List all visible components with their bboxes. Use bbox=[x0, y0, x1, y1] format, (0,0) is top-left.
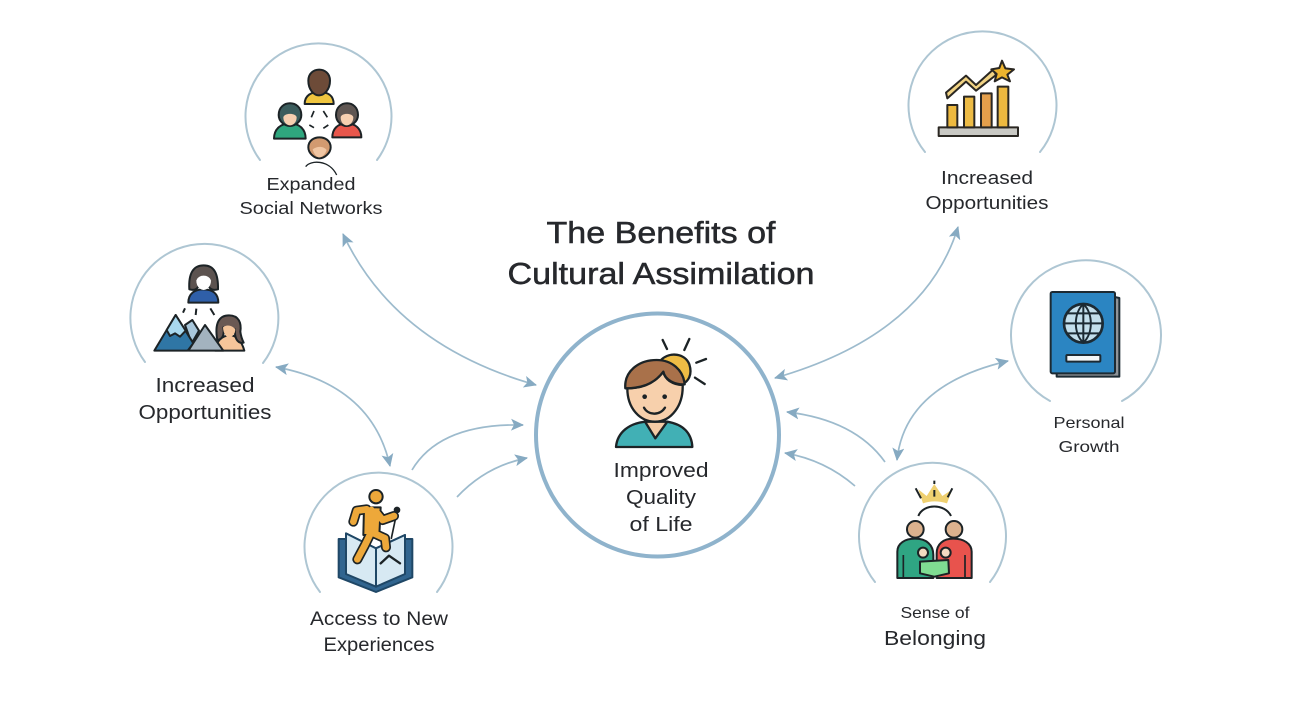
label bbox=[1054, 415, 1124, 456]
icon: hiker on open book bbox=[339, 490, 412, 592]
arrow: increased opportunities right to centre bbox=[775, 227, 958, 378]
hiker limbs outline bbox=[353, 509, 394, 559]
arrow: expanded social networks to centre bbox=[343, 234, 536, 385]
label bbox=[614, 460, 708, 536]
title bbox=[508, 215, 814, 291]
label: Expanded bbox=[266, 174, 356, 194]
label: Sense of bbox=[900, 605, 970, 622]
icon: rising bar chart with star bbox=[939, 61, 1018, 136]
arrow: increased opportunities to access to new experiences bbox=[276, 367, 390, 466]
label: Access to New bbox=[310, 609, 448, 630]
arrows connecting benefits to the centre bbox=[276, 227, 1008, 497]
label bbox=[138, 375, 272, 424]
label: Belonging bbox=[884, 627, 986, 650]
panel: improved quality of life bbox=[536, 314, 779, 556]
label: Experiences bbox=[324, 635, 434, 656]
label: Personal bbox=[1054, 415, 1124, 432]
label bbox=[310, 609, 448, 656]
label bbox=[926, 167, 1048, 213]
panel: access to new experiences bbox=[305, 473, 452, 656]
label: Increased bbox=[156, 375, 254, 397]
label: Opportunities bbox=[138, 402, 272, 424]
label: Social Networks bbox=[240, 198, 383, 218]
icon: smiling person with idea rays bbox=[616, 339, 706, 447]
title: Cultural Assimilation bbox=[508, 256, 814, 291]
label: Growth bbox=[1058, 439, 1120, 456]
arrow: access to new experiences to centre, lower bbox=[457, 458, 527, 497]
title: The Benefits of bbox=[546, 215, 776, 250]
label bbox=[884, 605, 986, 650]
arrow: personal growth to sense of belonging bbox=[897, 361, 1008, 460]
panel: increased opportunities left bbox=[130, 244, 278, 424]
panel: sense of belonging bbox=[859, 463, 1006, 650]
icon: two people exchanging under a crown bbox=[897, 481, 972, 578]
icon: group of four people bbox=[274, 70, 361, 175]
panel: increased opportunities right bbox=[908, 31, 1056, 213]
arrow: sense of belonging to centre, upper bbox=[787, 412, 885, 462]
label: Improved bbox=[614, 460, 708, 482]
label: Increased bbox=[941, 167, 1033, 188]
arrow: sense of belonging to centre, lower bbox=[785, 453, 855, 486]
label bbox=[240, 174, 383, 218]
label: Opportunities bbox=[926, 192, 1048, 213]
panel: expanded social networks bbox=[240, 43, 392, 218]
label: Quality bbox=[626, 487, 696, 509]
label: of Life bbox=[630, 514, 692, 536]
panel: personal growth bbox=[1011, 260, 1161, 456]
icon: woman above mountains with second woman bbox=[154, 265, 244, 351]
arrow: access to new experiences to centre, upper bbox=[412, 425, 523, 470]
icon: passport bbox=[1051, 292, 1119, 377]
